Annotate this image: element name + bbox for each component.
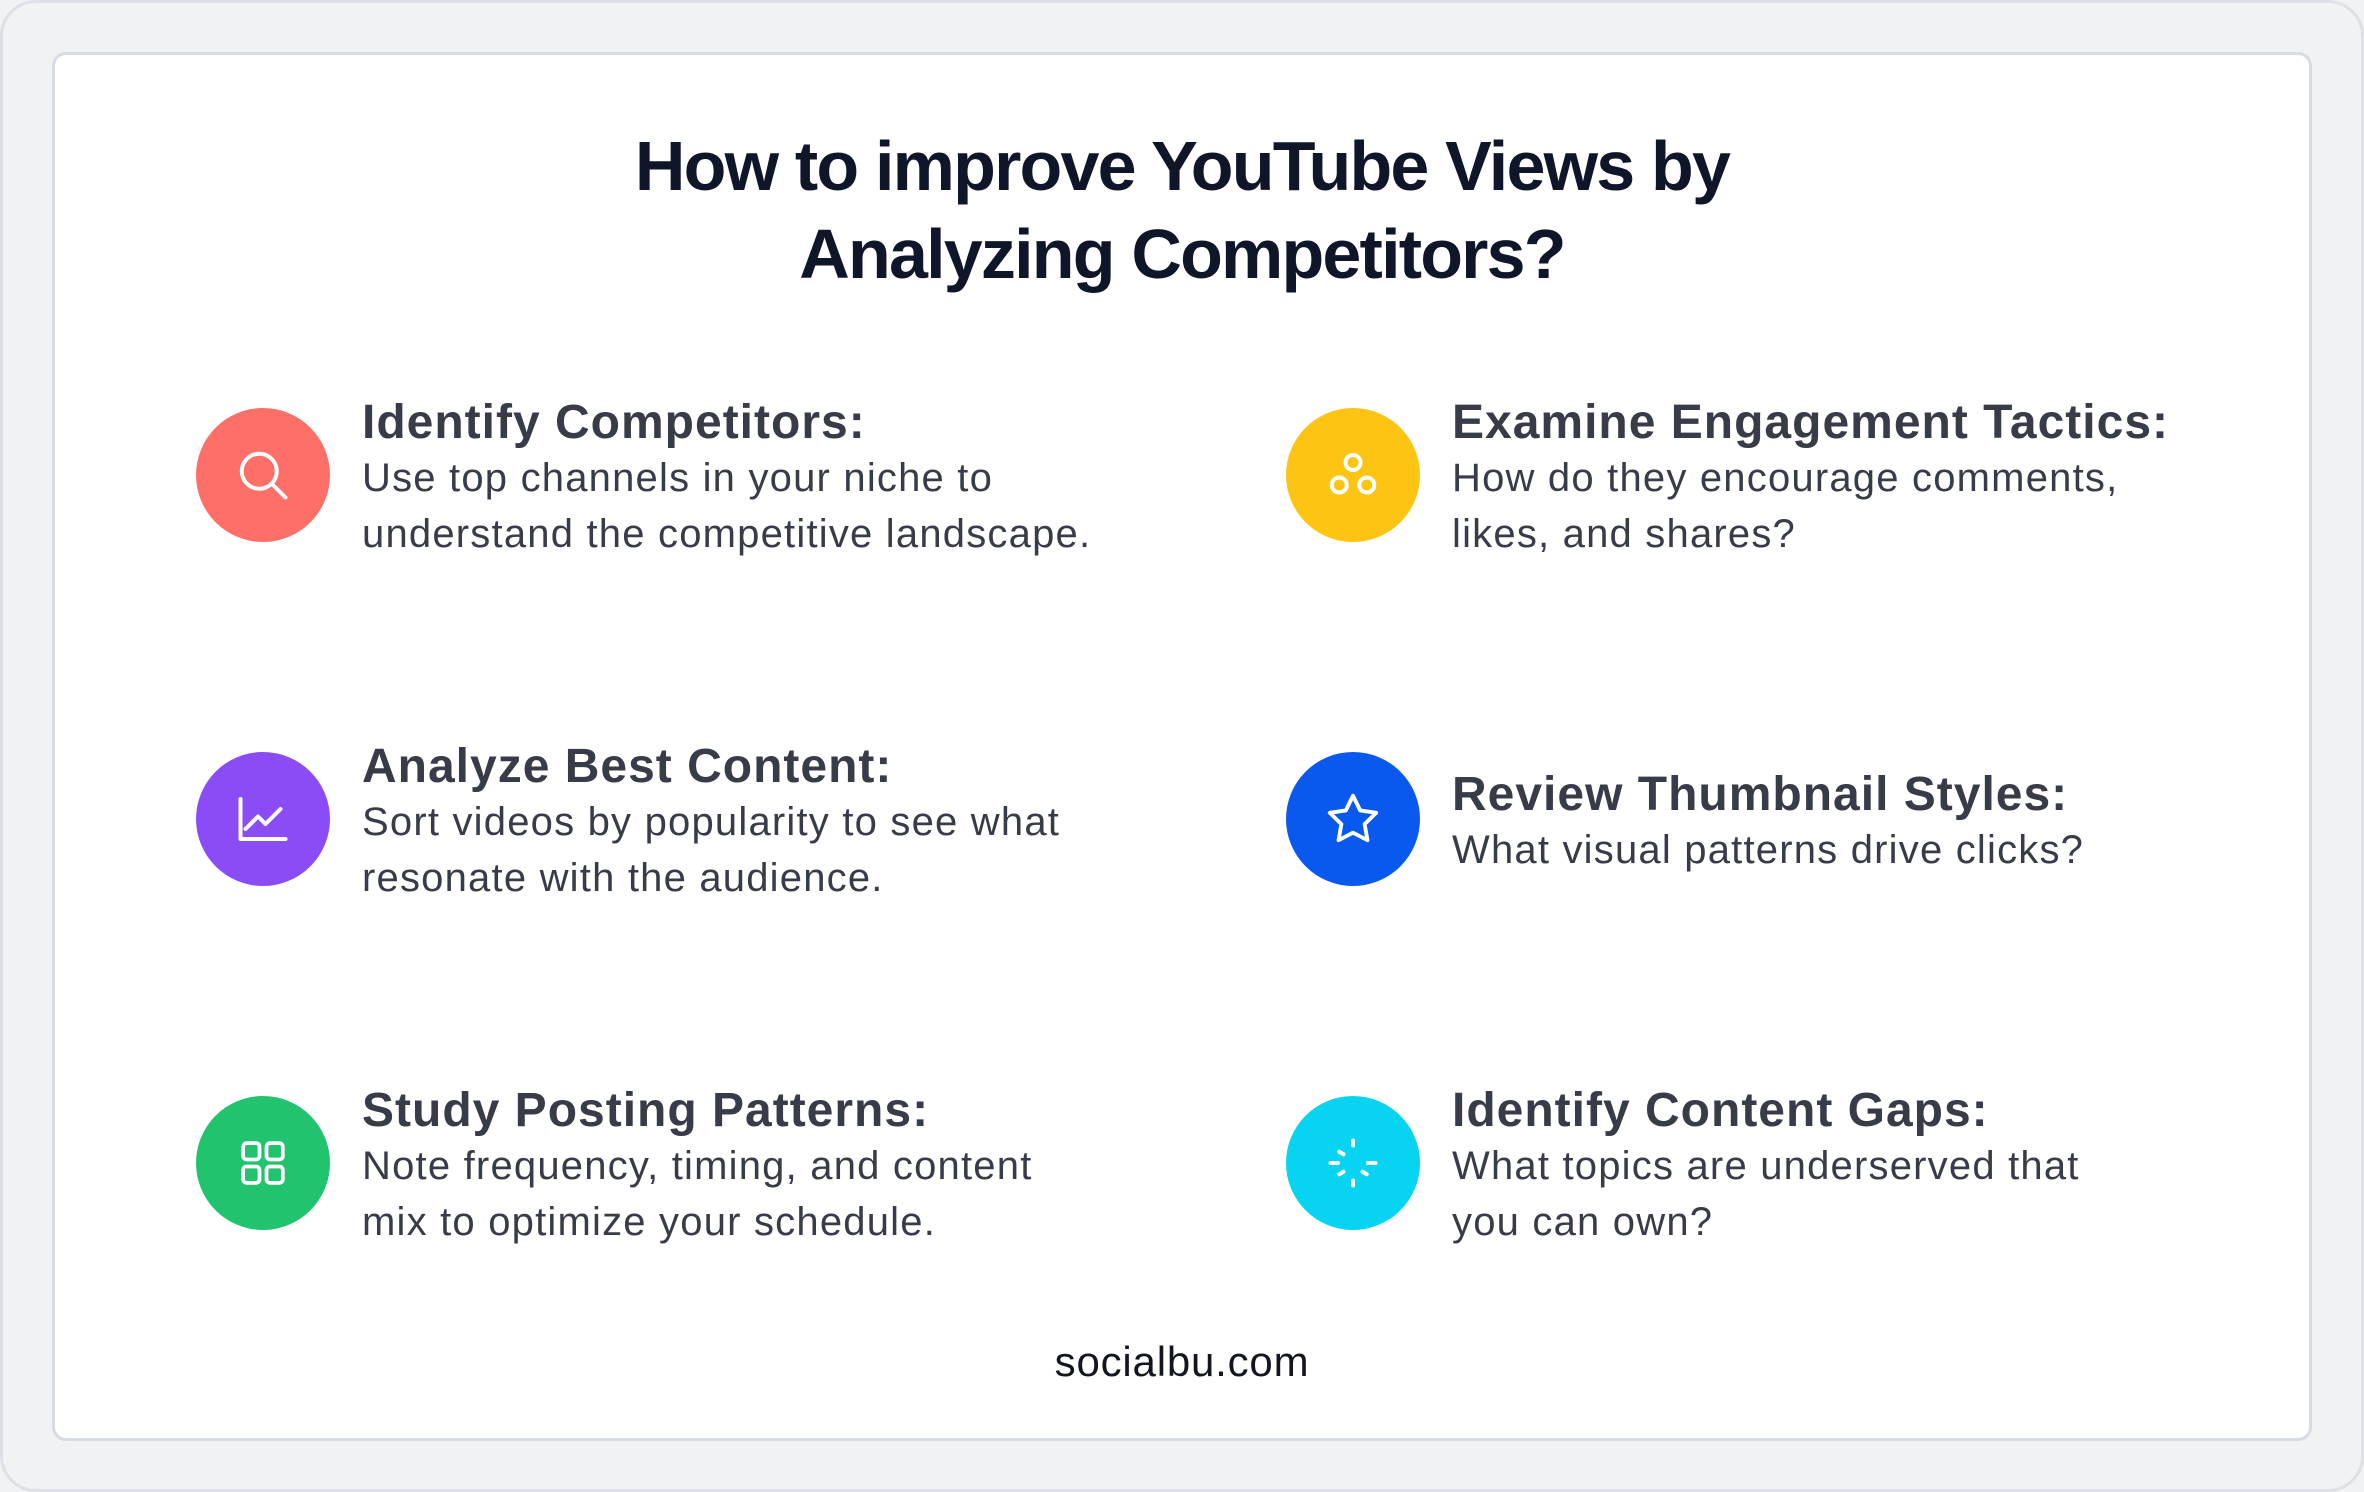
text (362, 396, 1091, 556)
icon: circles (1286, 408, 1420, 542)
text: likes, and shares? (1452, 512, 1796, 556)
text: Identify Competitors: (362, 396, 866, 449)
item: analyze best content (196, 740, 1060, 900)
text: Study Posting Patterns: (362, 1084, 929, 1137)
title: How to improve YouTube Views by (635, 127, 1729, 205)
item: identify competitors (196, 396, 1091, 556)
icon: sparkle (1286, 1096, 1420, 1230)
text: How do they encourage comments, (1452, 456, 2118, 500)
text: understand the competitive landscape. (362, 512, 1091, 556)
text: Note frequency, timing, and content (362, 1144, 1033, 1188)
text (362, 1084, 1033, 1244)
text: Use top channels in your niche to (362, 456, 993, 500)
footer: socialbu.com (1055, 1338, 1309, 1385)
text: resonate with the audience. (362, 856, 884, 900)
text (1452, 768, 2084, 872)
title: Analyzing Competitors? (799, 215, 1565, 293)
text: mix to optimize your schedule. (362, 1200, 936, 1244)
text (1452, 1084, 2080, 1244)
item: thumbnail styles (1286, 752, 2084, 886)
icon: grid (196, 1096, 330, 1230)
text: Identify Content Gaps: (1452, 1084, 1989, 1137)
text: Sort videos by popularity to see what (362, 800, 1060, 844)
icon: star (1286, 752, 1420, 886)
item: engagement tactics (1286, 396, 2169, 556)
text: Review Thumbnail Styles: (1452, 768, 2068, 821)
text: What topics are underserved that (1452, 1144, 2080, 1188)
text (362, 740, 1060, 900)
icon: chart (196, 752, 330, 886)
text: Examine Engagement Tactics: (1452, 396, 2169, 449)
text: Analyze Best Content: (362, 740, 892, 793)
text: you can own? (1452, 1200, 1713, 1244)
text: What visual patterns drive clicks? (1452, 828, 2084, 872)
text (1452, 396, 2169, 556)
title (635, 127, 1730, 293)
item: posting patterns (196, 1084, 1033, 1244)
item: content gaps (1286, 1084, 2080, 1244)
icon: search (196, 408, 330, 542)
